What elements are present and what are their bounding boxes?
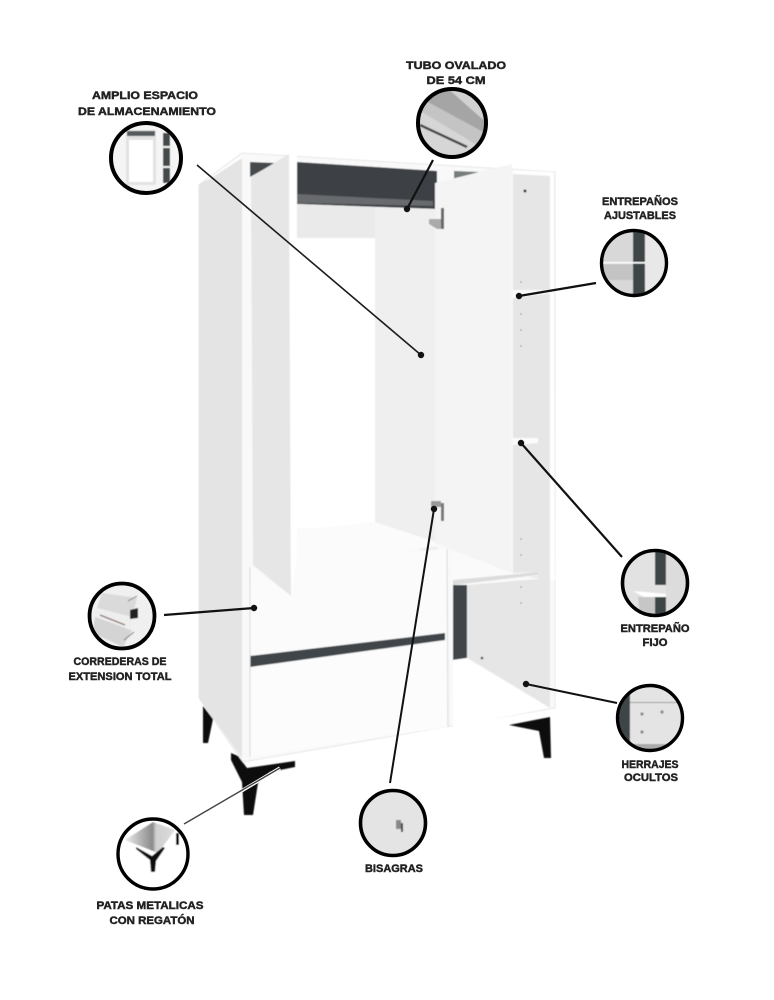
callout: entrepaños ajustables	[602, 230, 666, 296]
leader: amplio espacio	[197, 165, 424, 358]
callout: patas metálicas	[118, 819, 188, 889]
label: correderas: CORREDERAS DE	[74, 656, 166, 668]
label: entrepaño fijo	[620, 622, 690, 649]
label: entrepaños ajustables: ENTREPAÑOS	[602, 195, 678, 208]
back legs	[203, 706, 551, 758]
drawers	[250, 549, 448, 757]
lower cube	[453, 578, 550, 727]
callout: correderas	[89, 583, 155, 649]
hinges	[429, 208, 444, 521]
front legs	[231, 753, 295, 815]
open left door	[251, 153, 297, 596]
label: entrepaños ajustables: AJUSTABLES	[604, 210, 676, 222]
label: patas metálicas	[96, 900, 204, 927]
callout: entrepaño fijo	[622, 550, 688, 616]
interior back upper	[297, 204, 375, 238]
open right door	[435, 164, 512, 573]
label: amplio espacio: DE ALMACENAMIENTO	[78, 106, 216, 118]
label: bisagras: BISAGRAS	[365, 863, 423, 875]
callout: bisagras	[360, 790, 426, 856]
label: amplio espacio: AMPLIO ESPACIO	[92, 90, 198, 102]
label: tubo ovalado: DE 54 CM	[426, 75, 486, 87]
label: tubo ovalado	[406, 60, 506, 87]
wardrobe	[199, 153, 555, 815]
right column	[513, 170, 555, 580]
interior top dark band	[297, 162, 437, 209]
label: entrepaños ajustables	[602, 195, 678, 222]
wardrobe body	[199, 153, 555, 762]
label: herrajes ocultos	[622, 759, 678, 784]
interior floor	[297, 522, 445, 565]
middle shelf	[453, 552, 538, 585]
leader: herrajes ocultos	[523, 681, 617, 703]
label: correderas: EXTENSION TOTAL	[68, 671, 172, 683]
label: herrajes ocultos: HERRAJES	[622, 759, 678, 771]
interior right panel	[375, 207, 437, 560]
callout: tubo ovalado	[415, 86, 489, 160]
infographic	[69, 61, 690, 924]
label: patas metálicas: PATAS METALICAS	[96, 900, 204, 912]
label: tubo ovalado: TUBO OVALADO	[406, 60, 506, 72]
leader: entrepaño fijo	[518, 440, 622, 557]
leader: correderas	[164, 605, 257, 615]
leader: patas	[184, 768, 280, 824]
leader: bisagras	[390, 506, 437, 783]
leader: tubo ovalado	[404, 160, 433, 212]
callout: herrajes ocultos	[617, 685, 683, 751]
label: correderas	[68, 656, 172, 683]
label: entrepaño fijo: ENTREPAÑO	[620, 622, 690, 635]
leader: entrepaños ajustables	[516, 283, 596, 299]
label: patas metálicas: CON REGATÓN	[110, 914, 195, 927]
label: amplio espacio	[78, 90, 216, 118]
label: herrajes ocultos: OCULTOS	[624, 772, 678, 784]
callout: amplio espacio	[110, 122, 182, 194]
left side panel	[199, 158, 242, 758]
interior opening	[297, 238, 375, 528]
label: entrepaño fijo: FIJO	[642, 637, 668, 649]
